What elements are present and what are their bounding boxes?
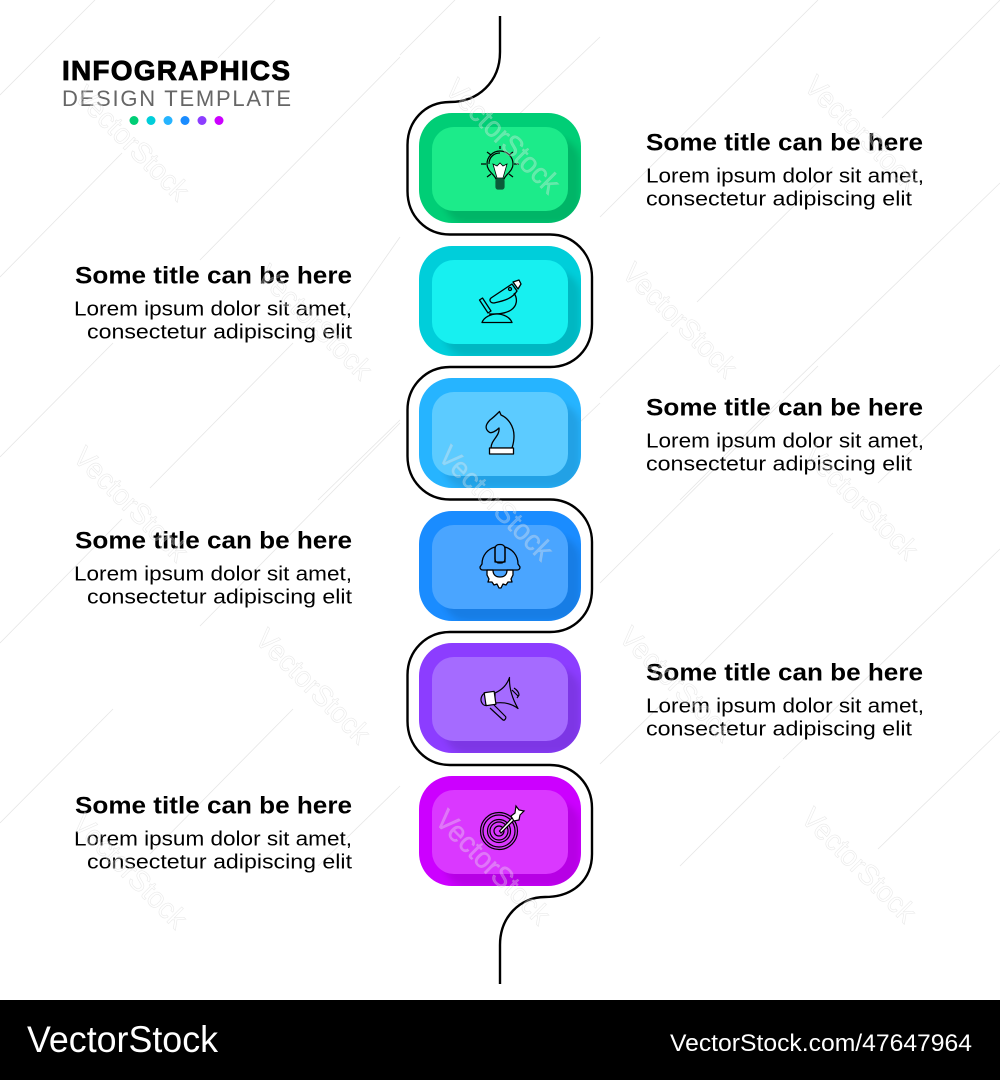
text block: step 3: Lorem ipsum dolor sit amet, [646, 430, 924, 452]
panel: step 2 cyan box [419, 246, 581, 356]
connector line [408, 16, 592, 984]
panel: step 4 blue box [419, 511, 581, 621]
panel: step 6 magenta box [419, 776, 581, 886]
text block: step 5: Some title can be here [646, 660, 923, 686]
watermark layer: VectorStock [616, 257, 743, 385]
text block: step 6: consectetur adipiscing elit [87, 852, 353, 874]
panel: step 3 light blue box [419, 378, 581, 488]
colour dots [130, 116, 224, 125]
watermark layer: VectorStock [68, 80, 195, 208]
icon: target with arrow [480, 806, 524, 850]
text block: step 5: Lorem ipsum dolor sit amet, [646, 696, 924, 718]
watermark layer: VectorStock [67, 441, 194, 569]
text block: step 2 [74, 262, 353, 344]
text block: step 5 [646, 660, 924, 740]
text block: step 3: consectetur adipiscing elit [646, 454, 913, 476]
text block: step 1: Some title can be here [646, 130, 923, 156]
watermark layer: VectorStock [432, 440, 559, 568]
panel: step 5 purple box [419, 643, 581, 753]
text block: step 2: Some title can be here [75, 262, 352, 290]
watermark layer: VectorStock [798, 70, 925, 198]
watermark layer: VectorStock [249, 623, 376, 751]
text block: step 4 [74, 528, 353, 608]
footer bar [0, 1000, 1000, 1080]
text block: step 3: Some title can be here [646, 394, 923, 422]
subheading: design template: DESIGN TEMPLATE [62, 86, 291, 111]
watermark layer: VectorStock [439, 73, 566, 201]
text block: step 1: consectetur adipiscing elit [646, 188, 913, 210]
icon: chess knight [486, 412, 514, 454]
title block [62, 55, 291, 125]
icon: megaphone [481, 678, 519, 720]
text block: step 4: consectetur adipiscing elit [87, 586, 353, 608]
panel: step 1 green box [419, 113, 581, 223]
text block: step 5: consectetur adipiscing elit [646, 718, 913, 740]
footer logo: VectorStock [27, 1019, 218, 1060]
watermark layer: VectorStock [429, 804, 556, 932]
text block: step 1: Lorem ipsum dolor sit amet, [646, 166, 924, 188]
text block: step 4: Lorem ipsum dolor sit amet, [74, 564, 352, 586]
icon: light bulb [481, 146, 519, 189]
text block: step 6: Lorem ipsum dolor sit amet, [74, 828, 352, 850]
text block: step 3 [646, 394, 924, 476]
text block: step 1 [646, 130, 924, 210]
watermark layer [66, 70, 925, 936]
text block: step 6: Some title can be here [75, 792, 352, 820]
icon: microscope [480, 280, 521, 322]
watermark layer: VectorStock [613, 621, 740, 749]
icon: helmet with gear [480, 544, 520, 588]
text block: step 2: Lorem ipsum dolor sit amet, [74, 298, 352, 320]
watermark layer: VectorStock [66, 808, 193, 936]
heading: infographics: INFOGRAPHICS [62, 55, 290, 86]
watermark layer: VectorStock [795, 802, 922, 930]
watermark layer: VectorStock [797, 439, 924, 567]
footer url: VectorStock.com/47647964 [670, 1030, 972, 1057]
text block: step 4: Some title can be here [75, 528, 352, 554]
watermark layer: VectorStock [251, 259, 378, 387]
text block: step 2: consectetur adipiscing elit [87, 322, 353, 344]
text block: step 6 [74, 792, 353, 874]
